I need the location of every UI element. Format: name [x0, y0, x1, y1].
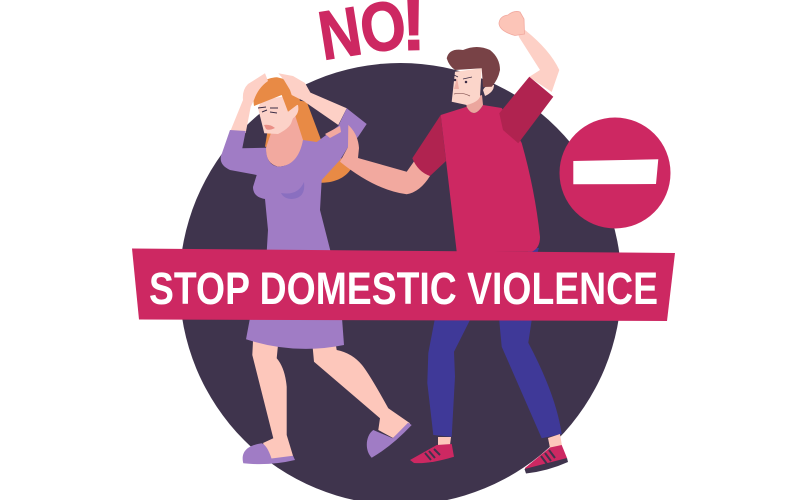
man angry face details — [454, 75, 472, 96]
woman hair front — [254, 77, 300, 112]
sign disc — [560, 118, 670, 228]
woman dress lower — [246, 318, 344, 349]
man left sleeve — [412, 115, 446, 176]
woman closed eyes and lips — [258, 107, 278, 130]
banner ribbon — [132, 248, 675, 321]
man face — [452, 68, 482, 105]
man legs — [427, 248, 562, 438]
woman ear — [287, 105, 298, 119]
no-entry sign — [560, 118, 670, 228]
woman legs — [252, 335, 410, 462]
man fist — [499, 11, 524, 36]
man raised arm — [518, 30, 559, 92]
woman slippers — [243, 423, 412, 464]
figure: man — [340, 11, 568, 474]
woman dress upper — [221, 108, 367, 252]
banner text: STOP DOMESTIC VIOLENCE — [149, 263, 658, 314]
figure: woman — [221, 73, 412, 464]
woman raised arms and hands — [230, 73, 347, 133]
sign white bar — [573, 159, 658, 184]
woman neck and chest — [266, 115, 303, 167]
man ankles — [438, 434, 562, 448]
man shoes — [410, 444, 568, 474]
dark background circle — [180, 63, 622, 500]
man shirt — [441, 105, 540, 252]
banner — [132, 248, 675, 321]
man ear — [483, 85, 494, 96]
man hair — [447, 47, 500, 87]
woman dress shading — [281, 182, 304, 199]
woman face — [258, 96, 296, 134]
woman back hair — [265, 100, 322, 147]
woman fingers on sleeve — [325, 126, 341, 138]
man right sleeve — [499, 77, 553, 143]
man reaching arm — [340, 125, 430, 194]
woman lower hair — [320, 158, 352, 183]
man neck — [466, 95, 483, 113]
